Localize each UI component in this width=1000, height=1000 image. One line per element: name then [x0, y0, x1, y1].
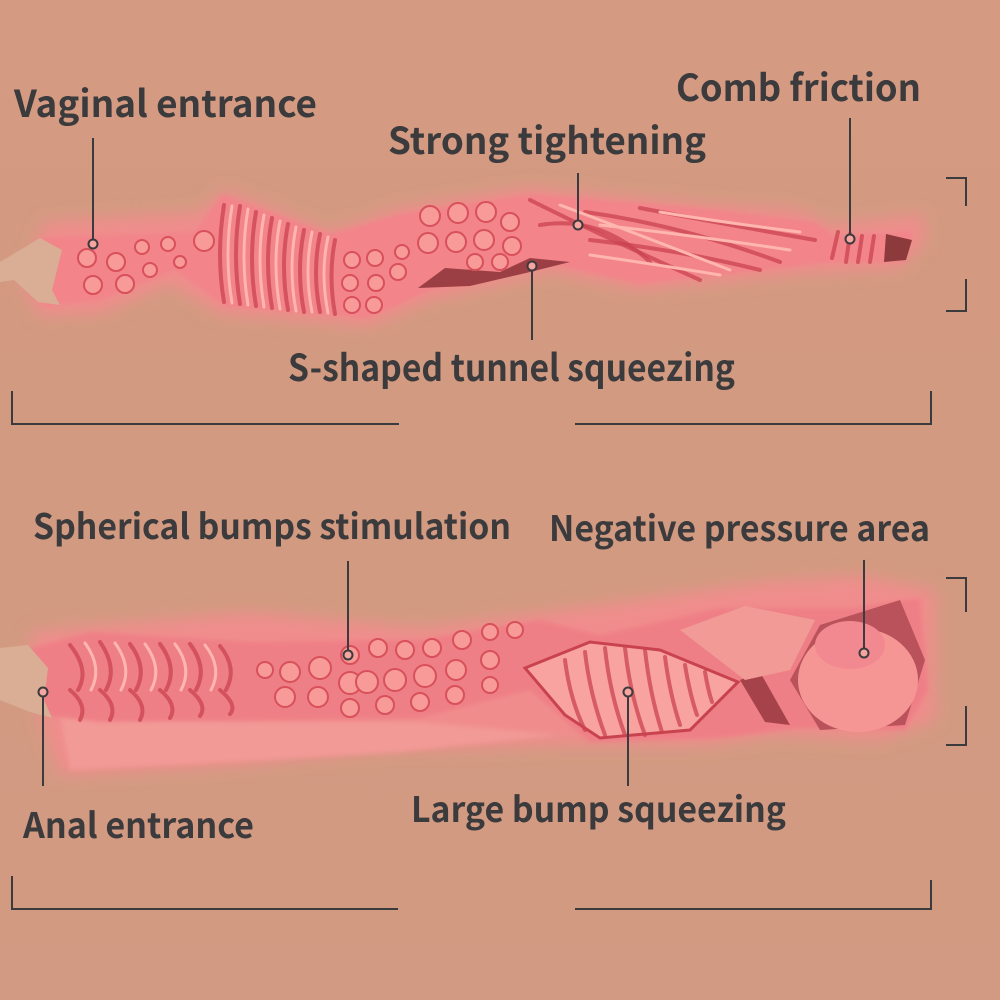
middle bumps	[342, 202, 521, 313]
tightening folds	[530, 200, 815, 280]
panel: vaginal tunnel	[0, 188, 926, 326]
label: Strong tightening: Strong tightening	[388, 111, 706, 165]
lower lip	[60, 715, 560, 770]
label: Strong tightening	[388, 111, 706, 230]
spherical bumps	[257, 622, 523, 717]
label: Spherical bumps stimulation: Spherical bumps stimulation	[33, 499, 511, 550]
entrance opening	[0, 645, 52, 718]
panel: anal tunnel	[0, 576, 935, 775]
comb ridges	[832, 232, 874, 262]
dark channels	[740, 672, 790, 725]
tunnel body	[25, 598, 928, 742]
spiral ridges	[70, 642, 232, 720]
label: Comb friction: Comb friction	[676, 58, 921, 112]
label: Vaginal entrance: Vaginal entrance	[13, 74, 317, 128]
ridged section	[220, 205, 335, 314]
label: Spherical bumps stimulation	[33, 499, 511, 660]
bracket: top right	[575, 391, 931, 424]
corner marks: bottom	[946, 578, 966, 745]
label: S-shaped tunnel squeezing	[288, 262, 735, 392]
comb end opening	[884, 234, 912, 262]
bracket: bottom right	[575, 880, 931, 909]
entrance bumps	[78, 231, 214, 294]
tunnel body	[20, 194, 912, 318]
dark channel	[418, 258, 570, 288]
entrance opening	[0, 238, 62, 305]
label: Comb friction	[676, 58, 921, 244]
bracket: top left	[12, 391, 399, 424]
label: Large bump squeezing	[411, 688, 786, 833]
corner marks: top	[946, 178, 966, 311]
large bump	[525, 642, 738, 738]
tunnel glow	[30, 576, 935, 775]
tunnel glow	[20, 188, 926, 326]
label: Negative pressure area	[549, 501, 930, 658]
label: Large bump squeezing: Large bump squeezing	[411, 782, 786, 833]
bracket: bottom left	[12, 876, 398, 909]
label: Anal entrance	[22, 688, 254, 849]
negative pressure area	[680, 600, 925, 732]
label: S-shaped tunnel squeezing: S-shaped tunnel squeezing	[288, 338, 735, 392]
label: Vaginal entrance	[13, 74, 317, 248]
label: Negative pressure area: Negative pressure area	[549, 501, 930, 552]
label: Anal entrance: Anal entrance	[22, 798, 254, 849]
